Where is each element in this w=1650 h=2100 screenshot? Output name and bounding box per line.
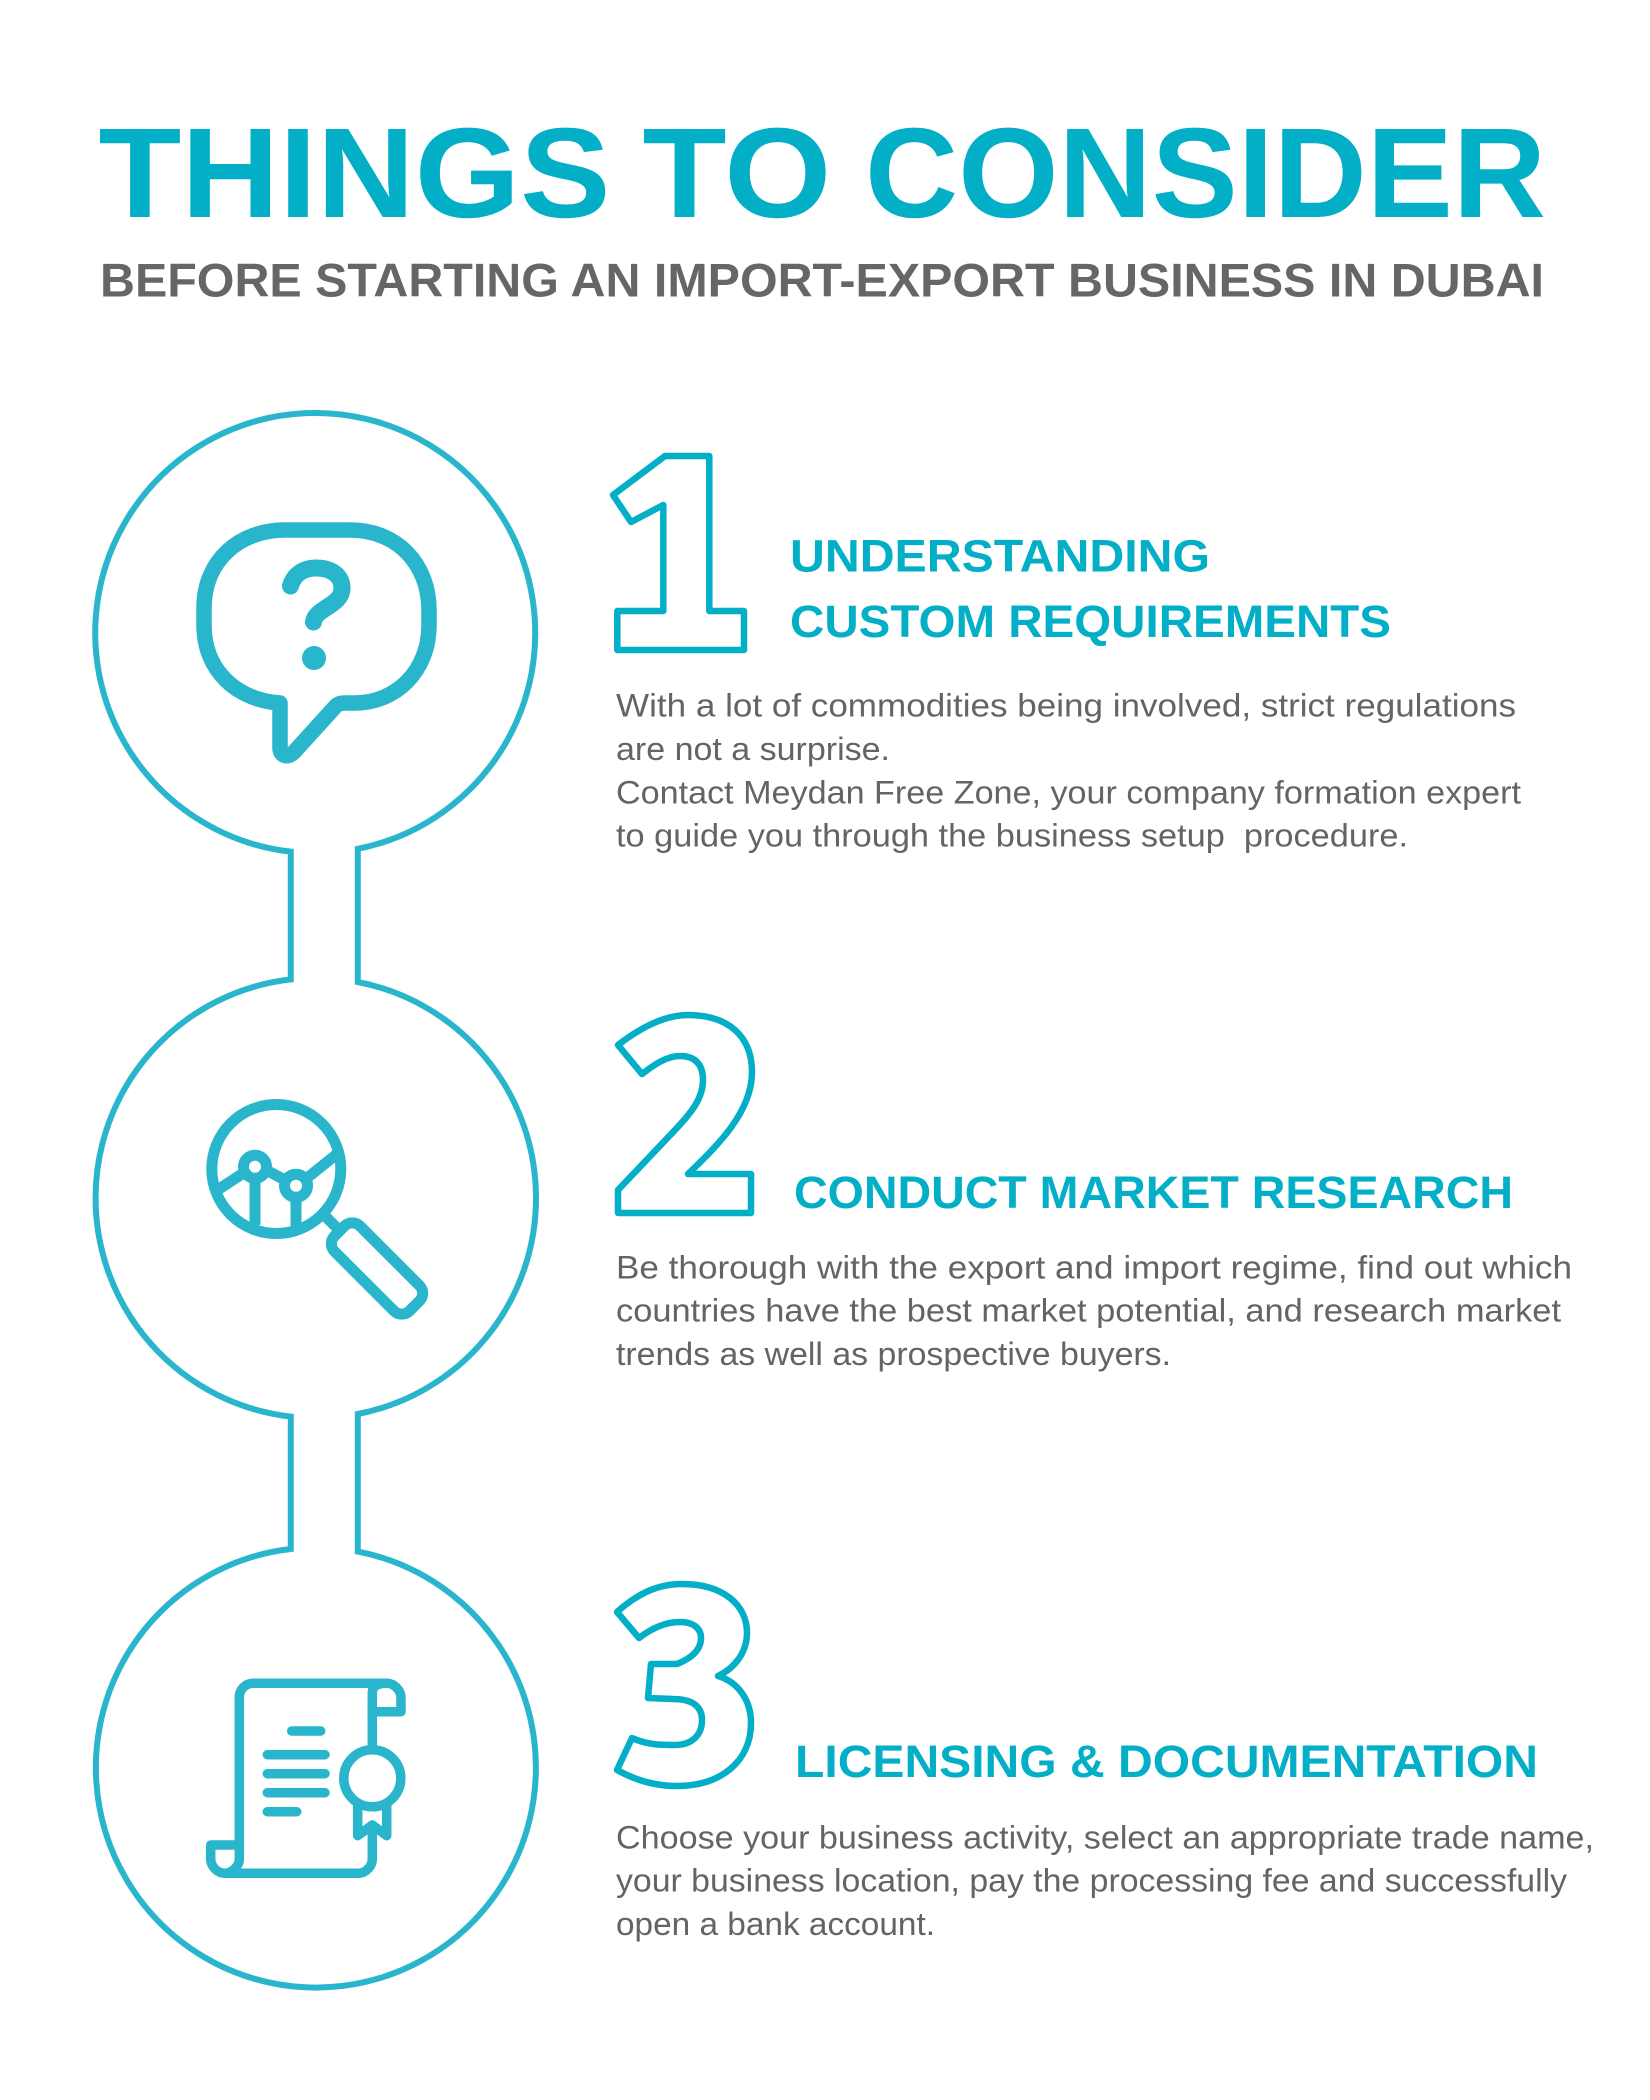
title: CONSIDER: [865, 102, 1546, 245]
heading 1: UNDERSTANDING: [790, 531, 1210, 582]
number 1: [613, 456, 744, 650]
text block 1: With a lot of commodities being involved, strict regulations: [616, 688, 1516, 724]
text block 1: [616, 688, 1521, 854]
text block 2: [616, 1249, 1572, 1372]
subtitle: BEFORE STARTING AN IMPORT-EXPORT BUSINESS IN DUBAI: [100, 255, 1544, 308]
icon: magnifier over chart: [212, 1104, 427, 1319]
icon: speech bubble with question mark: [204, 530, 429, 756]
heading 2: CONDUCT MARKET RESEARCH: [794, 1167, 1513, 1218]
title: THINGS: [98, 102, 610, 245]
number 2: [618, 1015, 752, 1213]
timeline outline: three connected circles: [95, 413, 536, 1988]
text block 2: trends as well as prospective buyers.: [616, 1336, 1171, 1372]
text block 1: are not a surprise.: [616, 731, 890, 767]
heading 3: LICENSING & DOCUMENTATION: [795, 1736, 1538, 1787]
text block 2: countries have the best market potential, and research market: [616, 1293, 1561, 1329]
text block 3: open a bank account.: [616, 1906, 935, 1942]
text block 3: Choose your business activity, select an appropriate trade name,: [616, 1819, 1594, 1855]
text block 1: to guide you through the business setup procedure.: [616, 818, 1408, 854]
text block 2: Be thorough with the export and import regime, find out which: [616, 1249, 1572, 1285]
title: TO: [642, 102, 831, 245]
text block 3: your business location, pay the processing fee and successfully: [616, 1863, 1567, 1899]
title: [98, 102, 1546, 245]
heading 1: [790, 531, 1391, 647]
icon: certificate scroll with seal: [211, 1683, 401, 1873]
text block 3: [616, 1819, 1594, 1942]
text block 1: Contact Meydan Free Zone, your company formation expert: [616, 774, 1521, 810]
number 3: [617, 1584, 751, 1786]
heading 1: CUSTOM REQUIREMENTS: [790, 596, 1391, 647]
